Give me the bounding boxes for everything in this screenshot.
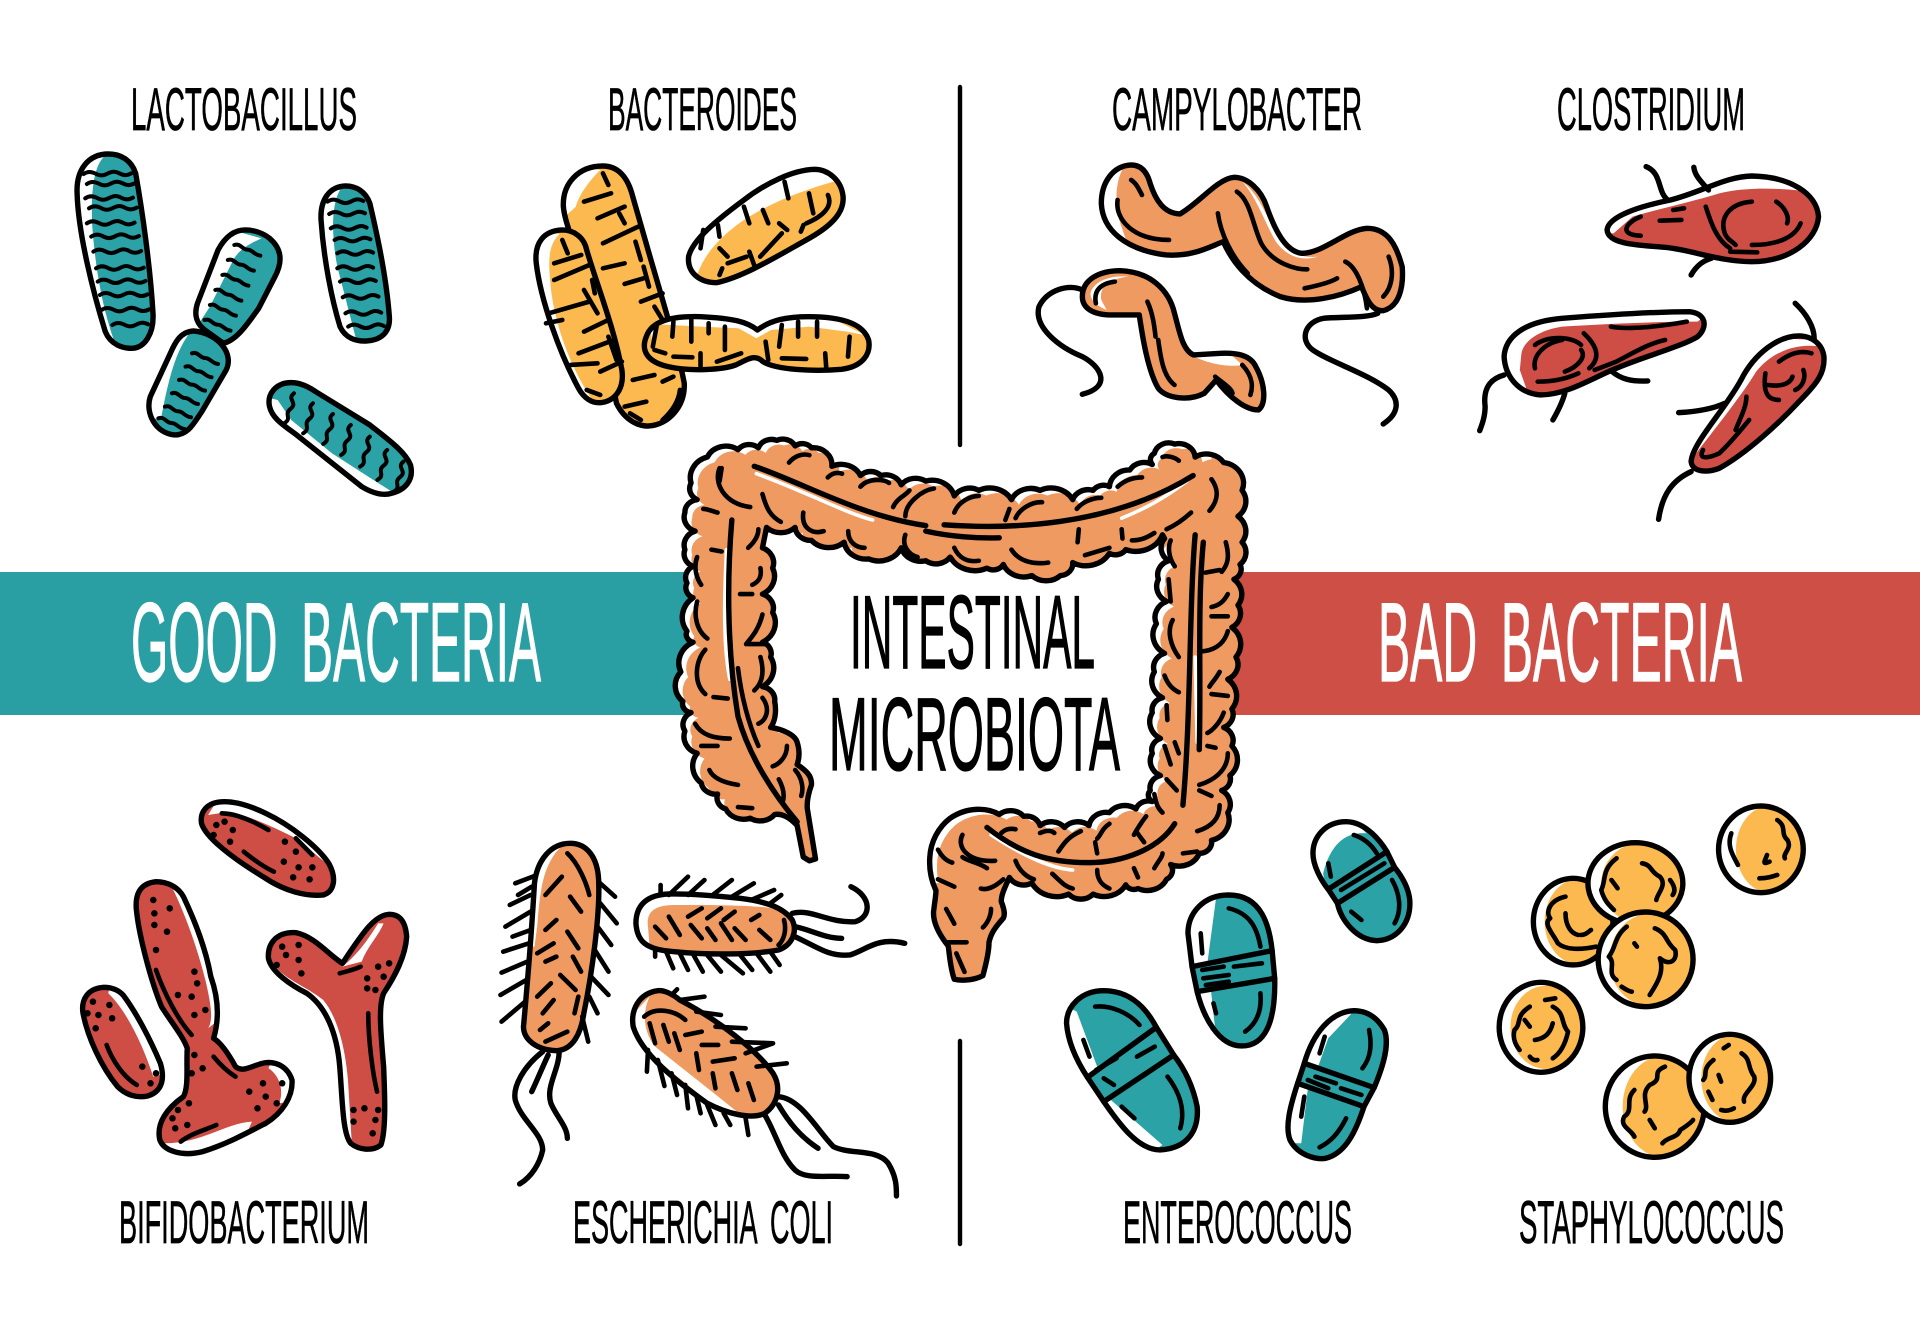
divider: top vertical line — [958, 87, 962, 445]
panel: bifidobacterium: BIFIDOBACTERIUM — [119, 1189, 369, 1256]
diagram: large intestine — [675, 439, 1260, 987]
panel: escherichia coli: ESCHERICHIA COLI — [573, 1189, 833, 1256]
panel: bacteroides: BACTEROIDES — [608, 76, 797, 143]
panel: lactobacillus: LACTOBACILLUS — [131, 76, 357, 143]
band: bad bacteria — [1225, 572, 1920, 715]
panel: enterococcus — [1060, 818, 1410, 1256]
title: intestinal microbiota — [829, 575, 1120, 793]
panel: escherichia coli — [500, 843, 905, 1256]
panel: enterococcus: ENTEROCOCCUS — [1123, 1189, 1352, 1256]
panel: clostridium — [1480, 76, 1824, 519]
panel: lactobacillus — [66, 76, 411, 500]
text: INTESTINAL — [850, 575, 1095, 691]
panel: bifidobacterium — [83, 802, 407, 1256]
panel: bacteroides — [522, 76, 869, 426]
band: good bacteria — [0, 572, 700, 715]
panel: campylobacter — [1038, 76, 1402, 424]
panel: campylobacter: CAMPYLOBACTER — [1112, 76, 1362, 143]
band: good bacteria: GOOD BACTERIA — [131, 580, 541, 705]
panel: staphylococcus — [1499, 806, 1803, 1256]
text: MICROBIOTA — [829, 677, 1120, 793]
divider: bottom vertical line — [958, 1041, 962, 1244]
